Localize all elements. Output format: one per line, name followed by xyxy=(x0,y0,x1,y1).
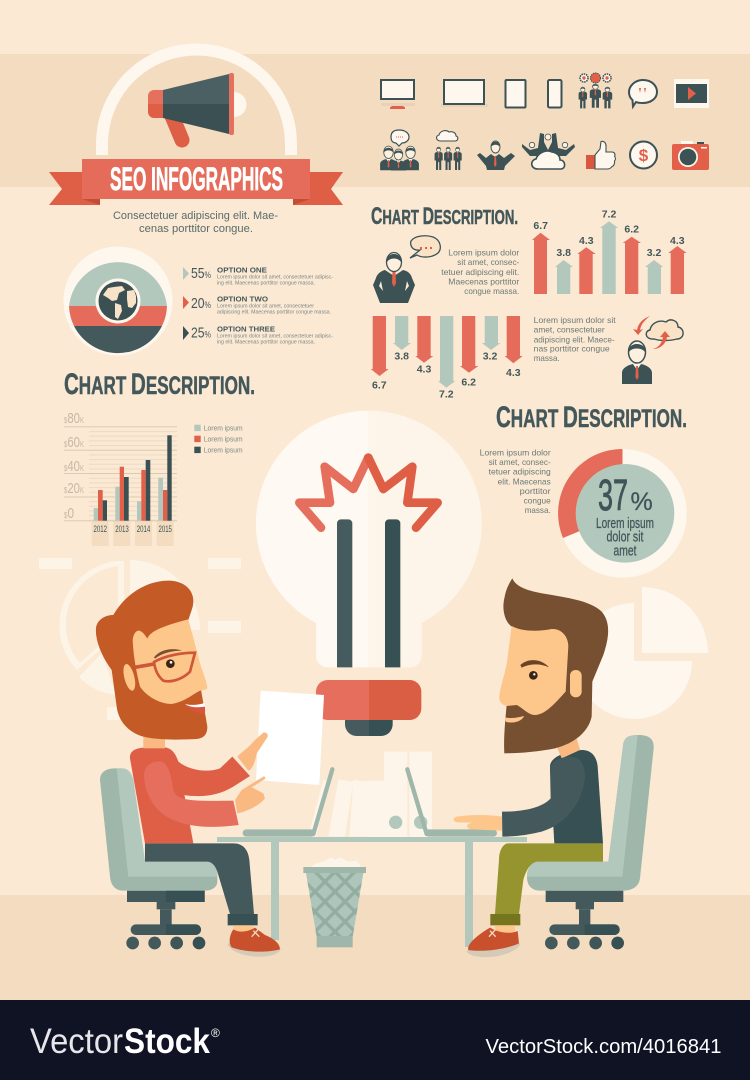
option list xyxy=(183,265,333,345)
footer logo: Vector xyxy=(30,1022,123,1061)
text block: donut paragraph: elit. Maecenas xyxy=(498,477,551,486)
text block: lower paragraph: Lorem ipsum dolor sit xyxy=(534,316,616,325)
icon: team with gears xyxy=(579,73,612,108)
laptop right xyxy=(407,769,497,837)
text block: donut paragraph: Lorem ipsum dolor xyxy=(480,448,551,457)
text block: top paragraph xyxy=(441,249,520,296)
title: SEO INFOGRAPHICS xyxy=(110,161,283,197)
down arrow chart: 6.2 xyxy=(461,377,476,389)
face xyxy=(133,619,207,704)
chart legend: Lorem ipsum xyxy=(204,426,243,432)
up arrow chart: 6.2 xyxy=(624,224,639,236)
option three: Lorem ipsum dolor sit amet, consectetuer adipisc- xyxy=(217,333,333,339)
mouth xyxy=(505,716,524,723)
donut chart 37 percent: % xyxy=(630,488,653,516)
text block: donut paragraph: congue xyxy=(524,496,551,505)
icon: tablet xyxy=(506,80,526,108)
bar chart: revenue by year: 2012 xyxy=(94,524,107,534)
bar chart: revenue by year xyxy=(64,410,177,546)
down arrow chart: 4.3 xyxy=(506,367,521,379)
up arrow chart: 7.2 xyxy=(602,208,616,220)
option two: OPTION TWO xyxy=(217,295,268,304)
heading: chart description right: CHART DESCRIPTION. xyxy=(496,401,687,434)
icon: camera xyxy=(672,141,709,170)
icon: thumbs up xyxy=(586,141,615,169)
hair and beard xyxy=(96,581,207,740)
icon: team with cloud xyxy=(435,131,462,170)
icon: team with chat bubble xyxy=(380,130,419,170)
icon: big light bulb xyxy=(256,411,482,736)
text block: donut paragraph: massa. xyxy=(525,506,551,515)
bar chart: revenue by year: $20K xyxy=(64,480,84,497)
icon grid xyxy=(380,73,709,170)
heading: chart description top right: CHART DESCRIPTION. xyxy=(371,203,518,230)
header band xyxy=(0,54,750,187)
chart legend xyxy=(194,425,243,454)
shoe xyxy=(228,928,281,957)
neck xyxy=(557,738,580,758)
icon: dollar coin: $ xyxy=(639,146,649,165)
text block: lower paragraph: amet, consectetuer xyxy=(534,325,605,334)
icon: widescreen tablet xyxy=(441,80,488,107)
option two: adipiscing elit. Maecenas porttitor congue massa. xyxy=(217,310,331,316)
torso xyxy=(130,747,193,843)
icon: continents xyxy=(103,286,136,319)
text block: lower paragraph: nas porttitor congue xyxy=(534,345,610,354)
text block: lower paragraph xyxy=(534,316,616,363)
bar chart: revenue by year: 2013 xyxy=(115,524,129,534)
donut with globe xyxy=(64,246,172,356)
neck xyxy=(143,735,165,748)
text block: lower paragraph: massa. xyxy=(534,354,560,363)
down arrow chart: 3.2 xyxy=(483,350,497,362)
option one: 55% xyxy=(191,265,211,282)
mouth xyxy=(185,703,205,713)
text block: top paragraph: Lorem ipsum dolor xyxy=(448,249,520,258)
text block: lower paragraph: adipiscing elit. Maece- xyxy=(534,335,615,344)
megaphone arch xyxy=(102,49,291,155)
bar chart: revenue by year: 2014 xyxy=(137,524,150,534)
bar chart: revenue by year: $40K xyxy=(64,458,84,475)
eyebrow xyxy=(154,649,182,659)
icon: dollar coin xyxy=(630,142,657,168)
laptop left xyxy=(243,769,332,837)
desk xyxy=(217,837,527,947)
background decoration: faint right pie chart xyxy=(576,587,708,719)
text block: top paragraph: congue massa. xyxy=(464,287,519,296)
footer logo: ® xyxy=(211,1026,220,1040)
right man in office chair xyxy=(454,578,654,957)
chart legend: Lorem ipsum xyxy=(204,436,243,444)
office chair xyxy=(527,735,654,949)
icon: speech bubble xyxy=(629,80,657,106)
left man in office chair xyxy=(96,581,324,957)
legs xyxy=(145,843,254,914)
subtitle: Consectetuer adipiscing elit. Mae- xyxy=(113,210,278,222)
up arrow chart: 4.3 xyxy=(579,235,594,247)
option three xyxy=(183,324,333,345)
icon: film strip xyxy=(674,79,709,108)
donut chart 37 percent xyxy=(558,449,687,578)
bar chart: revenue by year: $0 xyxy=(64,505,74,522)
subtitle: cenas porttitor congue. xyxy=(139,223,253,235)
donut chart 37 percent: dolor sit xyxy=(606,530,644,546)
donut chart 37 percent: amet xyxy=(614,544,636,560)
face xyxy=(499,626,568,715)
hand xyxy=(454,815,502,831)
bar chart: revenue by year: 2015 xyxy=(158,524,172,534)
option three: OPTION THREE xyxy=(217,324,275,333)
icon: megaphone xyxy=(148,73,246,140)
option three: ing elit. Maecenas porttitor congue massa. xyxy=(217,339,315,345)
binders on desk xyxy=(308,752,432,837)
option one xyxy=(183,265,333,286)
torso xyxy=(550,750,603,843)
down arrow chart: 7.2 xyxy=(439,389,454,401)
hands xyxy=(237,732,268,771)
icon: man with open arms xyxy=(477,141,515,170)
down arrow chart: 3.8 xyxy=(394,350,409,362)
paper xyxy=(256,691,324,785)
down arrow chart: 6.7 xyxy=(372,379,387,391)
heading: chart description left: CHART DESCRIPTION. xyxy=(64,368,255,401)
text block: donut paragraph: tetuer adipiscing xyxy=(489,467,551,476)
person with cloud and arrows xyxy=(622,316,683,384)
wastebasket xyxy=(303,858,366,948)
title ribbon xyxy=(49,159,343,205)
option one: Lorem ipsum dolor sit amet, consectetuer adipisc- xyxy=(217,274,333,280)
option two xyxy=(183,295,331,316)
up arrow chart: 4.3 xyxy=(670,235,685,247)
option three: 25% xyxy=(191,325,211,342)
subtitle xyxy=(113,210,278,235)
down arrow chart xyxy=(371,316,523,401)
ear xyxy=(570,670,582,697)
eye xyxy=(529,671,538,680)
icon: monitor xyxy=(381,80,415,109)
person with speech bubble xyxy=(373,236,440,303)
background decoration: faint left pie chart xyxy=(39,558,241,720)
icon: phone xyxy=(548,80,562,108)
footer bar xyxy=(0,1000,750,1080)
text block: top paragraph: sit amet, consec- xyxy=(457,258,520,267)
floor band xyxy=(0,895,750,1000)
footer url: VectorStock.com/4016841 xyxy=(486,1036,722,1058)
chart legend: Lorem ipsum xyxy=(204,448,243,454)
text block: donut paragraph: porttitor xyxy=(520,487,551,496)
up arrow chart: 3.8 xyxy=(556,247,571,259)
up arrow chart: 3.2 xyxy=(647,247,661,259)
option one: OPTION ONE xyxy=(217,265,267,274)
text block: donut paragraph: sit amet, consec- xyxy=(489,458,551,467)
bar chart: revenue by year: $80K xyxy=(64,410,84,427)
option one: ing elit. Maecenas porttitor congue massa. xyxy=(217,280,315,286)
shoe xyxy=(467,928,520,957)
legs xyxy=(495,843,603,914)
icon: people on cloud xyxy=(522,133,575,169)
option two: 20% xyxy=(191,295,211,312)
office chair xyxy=(100,768,217,949)
footer logo xyxy=(30,1022,220,1061)
bar chart: revenue by year: $60K xyxy=(64,434,84,451)
ear xyxy=(121,663,137,692)
up arrow chart: 6.7 xyxy=(533,220,548,232)
text block: top paragraph: tetuer adipiscing elit. xyxy=(441,268,519,277)
glasses xyxy=(135,653,195,681)
eye xyxy=(166,659,175,668)
eyebrow xyxy=(520,660,549,668)
up arrow chart xyxy=(532,208,687,294)
donut chart 37 percent: 37 xyxy=(598,471,628,520)
text block: donut paragraph xyxy=(480,448,551,515)
option two: Lorem ipsum dolor sit amet, consectetuer xyxy=(217,304,314,310)
hair and beard xyxy=(503,578,608,753)
down arrow chart: 4.3 xyxy=(417,364,431,376)
year tabs xyxy=(92,521,174,546)
footer logo: Stock xyxy=(124,1022,210,1061)
text block: top paragraph: Maecenas porttitor xyxy=(448,277,520,286)
donut chart 37 percent: Lorem ipsum xyxy=(596,516,654,532)
